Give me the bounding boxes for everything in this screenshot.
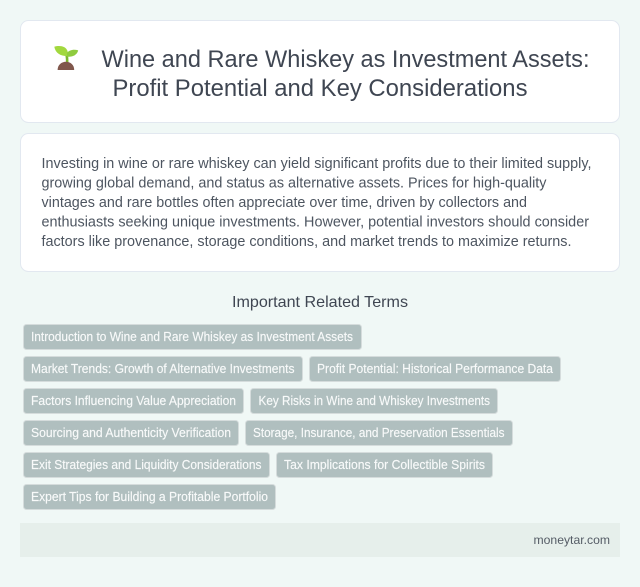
text block: summary paragraph: factors like provenance, storage conditions, and market trends to maximize returns. (42, 233, 572, 250)
icon: seedling (54, 46, 78, 70)
panel: related term tags (24, 324, 560, 510)
heading: important related terms: Important Related Terms (232, 294, 408, 311)
tag: value appreciation: Factors Influencing Value Appreciation (31, 394, 236, 408)
tag: expert tips (24, 484, 276, 510)
tag: storage (246, 420, 512, 446)
tag: introduction: Introduction to Wine and Rare Whiskey as Investment Assets (31, 330, 353, 344)
tag: profit potential: Profit Potential: Historical Performance Data (317, 362, 553, 376)
title: Wine and Rare Whiskey as Investment Assets: (102, 46, 590, 73)
title: Profit Potential and Key Considerations (112, 75, 528, 102)
tag: key risks (250, 388, 498, 414)
tag: market trends (24, 356, 302, 382)
tag: value appreciation (24, 388, 244, 414)
panel: title card (20, 20, 620, 122)
text block: summary paragraph: vintages and rare bottles often appreciate over time, driven by collectors and (42, 194, 527, 211)
footer (20, 523, 620, 557)
text block: summary paragraph: enthusiasts seeking unique investments. However, potential investors should consider (42, 214, 589, 230)
tag: key risks: Key Risks in Wine and Whiskey Investments (258, 394, 490, 408)
title (102, 46, 590, 102)
tag: introduction (24, 324, 362, 350)
tag: sourcing: Sourcing and Authenticity Verification (31, 426, 231, 440)
tag: storage: Storage, Insurance, and Preservation Essentials (253, 426, 504, 440)
tag: tax implications (276, 452, 492, 478)
tag: tax implications: Tax Implications for Collectible Spirits (284, 458, 485, 472)
tag: profit potential (310, 356, 560, 382)
tag: exit strategies: Exit Strategies and Liquidity Considerations (31, 458, 262, 472)
text block: summary paragraph (42, 155, 592, 250)
text block: summary paragraph: growing global demand, and status as alternative assets. Prices for high-quality (42, 174, 547, 192)
footer source text: moneytar.com (534, 533, 610, 547)
tag: exit strategies (24, 452, 270, 478)
panel: summary card (20, 134, 620, 272)
tag: market trends: Market Trends: Growth of Alternative Investments (31, 362, 294, 376)
text block: summary paragraph: Investing in wine or rare whiskey can yield significant profits due to their limited supply, (42, 155, 592, 172)
tag: sourcing (24, 420, 238, 446)
tag: expert tips: Expert Tips for Building a Profitable Portfolio (31, 490, 268, 504)
